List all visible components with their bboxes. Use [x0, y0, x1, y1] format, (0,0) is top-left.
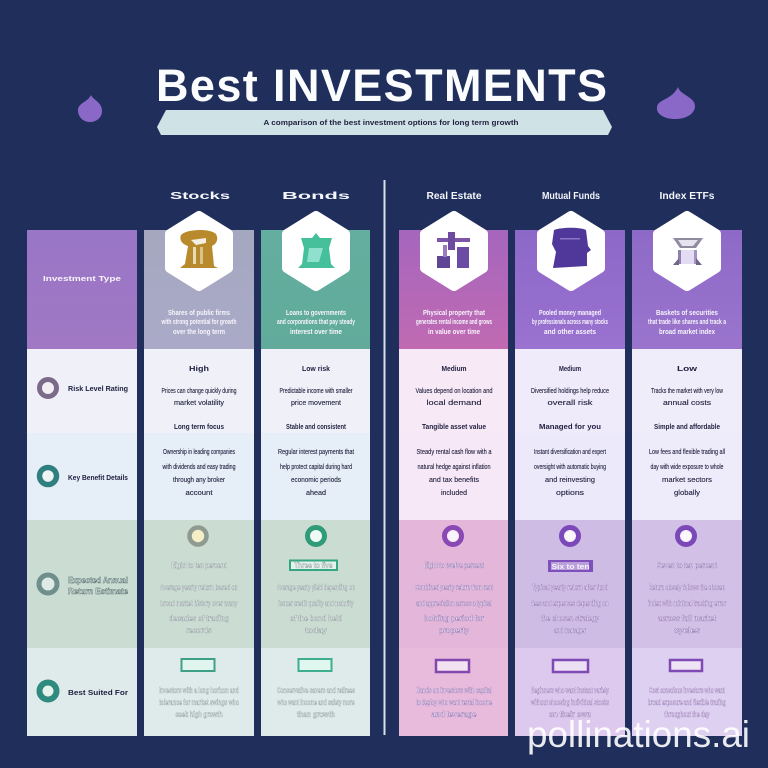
row label: expected returns [39, 575, 129, 596]
icon: right purple leaf [657, 87, 695, 119]
row 2 text [534, 447, 607, 497]
row 4 text [159, 686, 239, 719]
row 3 text: and manager [554, 626, 586, 635]
row 2 text: ahead [306, 488, 326, 497]
description [416, 308, 492, 336]
description: and corporations that pay steady [277, 317, 356, 326]
row 3 text: the chosen strategy [541, 614, 599, 623]
description: over the long term [173, 327, 225, 336]
row 1 text: Prices can change quickly during [162, 386, 236, 395]
row 4 text: than growth [297, 710, 335, 719]
purple tag with return value [548, 560, 593, 572]
row 2 text: oversight with automatic buying [534, 462, 606, 471]
column name: Bonds [282, 191, 351, 202]
row 1 text: Medium [442, 364, 467, 373]
row 3 text [648, 561, 726, 635]
icon: purple tag [436, 660, 469, 672]
row label: risk level [40, 380, 128, 396]
row 3 text: Average yearly yield depending on [277, 583, 355, 592]
row 1 text: overall risk [548, 398, 593, 407]
description: Baskets of securities [656, 308, 718, 317]
row 3 text: Typical yearly return after fund [532, 583, 608, 592]
icon: green tag [182, 659, 214, 671]
description: and other assets [544, 327, 596, 336]
column name: Index ETFs [660, 191, 715, 202]
row 2 text: account [186, 488, 213, 497]
row 3 text: today [305, 626, 328, 635]
row label: risk level: Risk Level Rating [68, 384, 128, 393]
row 3 text [277, 583, 355, 635]
row 4 text: who want income and safety more [277, 698, 355, 707]
row label: key benefits: Key Benefit Details [68, 473, 128, 482]
icon: purple building [425, 216, 483, 286]
row 4 text: tolerance for market swings who [159, 698, 239, 707]
row 2 text: Instant diversification and expert [534, 447, 607, 456]
green tag with return value: Three to five [294, 561, 333, 570]
icon: purple bust [542, 216, 600, 286]
row 1 text: market volatility [174, 398, 224, 407]
row 1 text: Stable and consistent [286, 422, 346, 431]
row 2 text: market sectors [662, 475, 712, 484]
row 2 text: globally [674, 488, 700, 497]
row 3 text: decades of trading [169, 614, 229, 623]
row 2 text: Ownership in leading companies [163, 447, 235, 456]
row 4 text: to deploy who want rental income [416, 698, 492, 707]
panel: bonds column [261, 191, 370, 736]
row 1 text: Simple and affordable [654, 422, 720, 431]
row 3 text: Eight to ten percent [172, 561, 227, 570]
row 3 text [532, 583, 609, 635]
icon: purple tag [553, 660, 588, 672]
row label: key benefits [40, 468, 128, 484]
row label: best suited for [40, 682, 128, 700]
purple tag with return value: Six to ten [552, 562, 590, 571]
row 1 text: local demand [426, 398, 482, 407]
row 1 text: Tracks the market with very low [651, 386, 723, 395]
icon: purple tag [670, 660, 702, 671]
row 3 text: property [439, 626, 470, 635]
row label: best suited for: Best Suited For [68, 688, 128, 697]
row 1 text: annual costs [663, 398, 711, 407]
row 4 text: seek high growth [176, 710, 223, 719]
description: Shares of public firms [168, 308, 230, 317]
icon: returns badge [444, 528, 462, 544]
row 3 text: fees and expenses depending on [532, 599, 609, 608]
row 2 text: natural hedge against inflation [418, 462, 490, 471]
row 3 text: and appreciation across a typical [416, 599, 492, 608]
row 4 text: on their own [549, 710, 591, 719]
description [161, 308, 237, 336]
row 3 text: of the bond held [290, 614, 342, 623]
subtitle banner [157, 110, 612, 135]
column name: Real Estate [426, 191, 482, 202]
row 3 text: across full market [658, 614, 716, 623]
row 3 text: broad market history over many [160, 599, 238, 608]
row 2 text: Steady rental cash flow with a [416, 447, 492, 456]
watermark: pollinations.ai [527, 714, 750, 755]
row 2 text [278, 447, 355, 497]
row 1 text [651, 364, 723, 431]
description: that trade like shares and track a [648, 317, 727, 326]
row 1 text: Low [677, 364, 697, 373]
row 4 text [277, 686, 355, 719]
title: Best INVESTMENTS [156, 60, 608, 111]
row 1 text: Tangible asset value [422, 422, 486, 431]
row 4 text: throughout the day [664, 710, 710, 719]
description [532, 308, 608, 336]
panel: real estate column [399, 191, 508, 736]
row 1 text: Managed for you [539, 422, 601, 431]
row 3 text: records [186, 626, 212, 635]
heading: investment type: Investment Type [43, 274, 121, 283]
row 1 text: Long term focus [174, 422, 224, 431]
row label: expected returns: Return Estimate [68, 587, 129, 596]
row 2 text: through any broker [173, 475, 225, 484]
panel: row labels column [27, 230, 137, 736]
row 1 text: Values depend on location and [416, 386, 492, 395]
row 4 text [416, 686, 492, 719]
row 4 text: and leverage [432, 710, 477, 719]
row 2 text: economic periods [291, 475, 341, 484]
row 1 text [531, 364, 609, 431]
column name: Mutual Funds [542, 191, 600, 202]
row 1 text: Low risk [302, 364, 331, 373]
row 4 text: Conservative savers and retirees [277, 686, 355, 695]
row 1 text: High [189, 364, 209, 373]
row 3 text: Combined yearly return from rent [415, 583, 493, 592]
row 3 text: Average yearly return based on [160, 583, 238, 592]
row 1 text: Diversified holdings help reduce [531, 386, 609, 395]
description [648, 308, 727, 336]
row 3 text: holding period for [424, 614, 484, 623]
row 4 text: Investors with a long horizon and [159, 686, 239, 695]
row 2 text: Low fees and flexible trading all [649, 447, 725, 456]
panel: mutual funds column [515, 191, 625, 736]
column name: Stocks [170, 191, 231, 202]
row 2 text [162, 447, 236, 497]
icon: left purple leaf [78, 95, 102, 122]
description: with strong potential for growth [161, 317, 237, 326]
icon: returns badge [562, 528, 578, 544]
row 1 text [162, 364, 236, 431]
description: Loans to governments [286, 308, 346, 317]
row 2 text: Regular interest payments that [278, 447, 355, 456]
subtitle banner: A comparison of the best investment options for long term growth [264, 118, 519, 127]
panel: ETFs column [632, 191, 742, 736]
row 2 text: help protect capital during hard [280, 462, 352, 471]
panel: stocks column [144, 191, 254, 736]
vertical divider [384, 180, 386, 735]
row 2 text: included [441, 488, 467, 497]
description: Physical property that [423, 308, 485, 317]
row 1 text [416, 364, 492, 431]
icon: returns badge [308, 528, 324, 544]
icon: pale pedestal [658, 216, 716, 286]
row 3 text: Eight to twelve percent [424, 561, 484, 570]
row 4 text [530, 686, 609, 719]
icon: returns badge [190, 528, 206, 544]
row label: expected returns: Expected Annual [68, 576, 128, 585]
description: Pooled money managed [539, 308, 601, 317]
row 2 text [416, 447, 492, 497]
row 3 text [160, 561, 238, 635]
row 4 text: Beginners who want instant variety [531, 686, 609, 695]
row 2 text: with dividends and easy trading [162, 462, 236, 471]
row 2 text: day with wide exposure to whole [650, 462, 724, 471]
description: interest over time [290, 327, 342, 336]
row 2 text: and reinvesting [545, 475, 595, 484]
row 4 text [648, 686, 726, 719]
row 1 text: price movement [291, 398, 342, 407]
description [277, 308, 356, 336]
icon: green tag [298, 659, 332, 671]
row 2 text: and tax benefits [429, 475, 479, 484]
description: generates rental income and grows [416, 317, 492, 326]
row 2 text [649, 447, 725, 497]
row 3 text [415, 561, 493, 635]
description: broad market index [659, 327, 716, 336]
description: by professionals across many stocks [532, 317, 608, 326]
row 4 text: Hands on investors with capital [416, 686, 492, 695]
row 3 text: Seven to ten percent [657, 561, 717, 570]
row 3 text: cycles [674, 626, 701, 635]
icon: gold temple [170, 216, 228, 286]
icon: returns badge [678, 528, 694, 544]
description: in value over time [428, 327, 480, 336]
icon: green temple [287, 216, 345, 286]
row 2 text: options [556, 488, 584, 497]
row 3 text: issuer credit quality and maturity [278, 599, 354, 608]
row 1 text [280, 364, 353, 431]
row 4 text: without choosing individual stocks [530, 698, 609, 707]
row 1 text: Predictable income with smaller [280, 386, 353, 395]
row 1 text: Medium [559, 364, 581, 373]
